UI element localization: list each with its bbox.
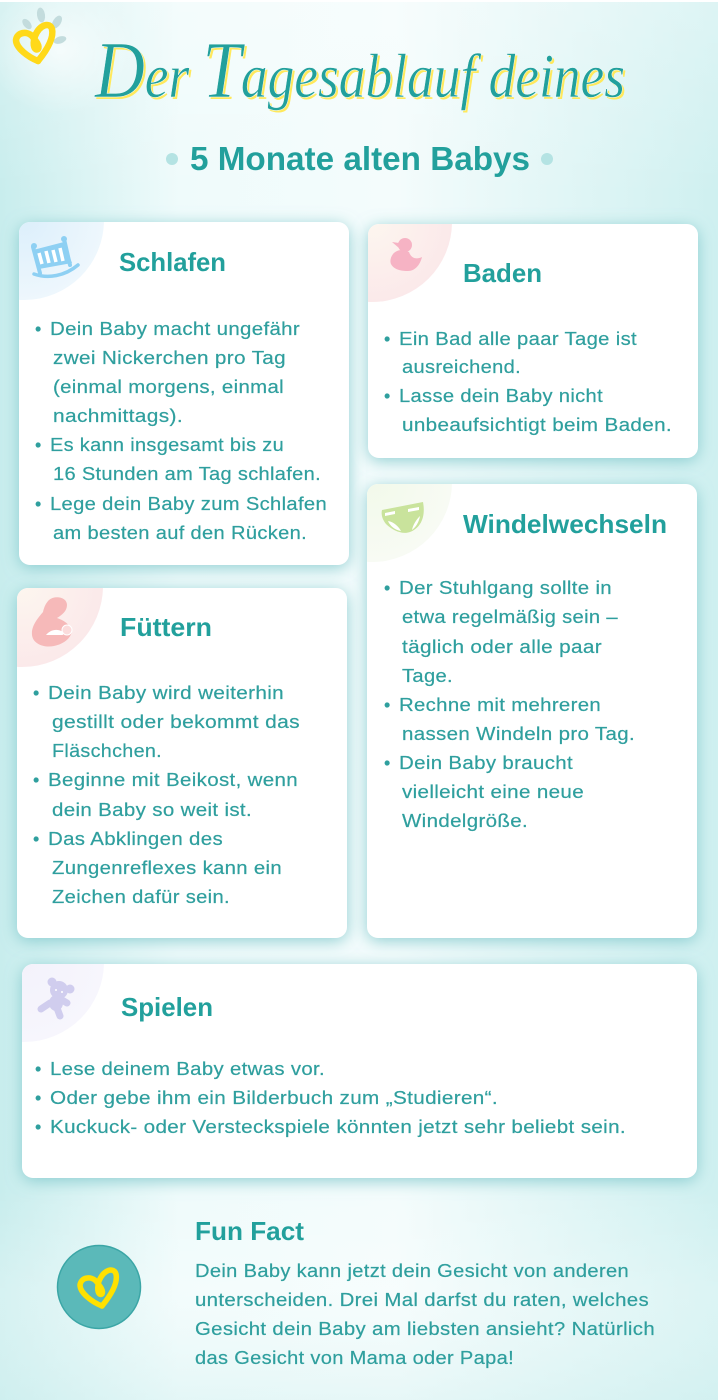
bullet list [35, 319, 327, 543]
bullet list: zwei Nickerchen pro Tag [53, 348, 286, 368]
bullet list: gestillt oder bekommt das [52, 712, 300, 732]
bullet list: Lese deinem Baby etwas vor. [50, 1059, 325, 1079]
bullet list: Zeichen dafür sein. [52, 887, 230, 907]
icon: mother nursing baby [32, 597, 72, 647]
bullet list [384, 578, 635, 831]
bullet list: Der Stuhlgang sollte in [399, 578, 612, 598]
bullet list: Beginne mit Beikost, wenn [48, 770, 298, 790]
card background [368, 224, 698, 458]
icon: diaper [382, 502, 424, 533]
title: Der Tagesablauf deines [96, 29, 627, 117]
bullet list: • [384, 753, 391, 773]
fun fact text [195, 1216, 655, 1368]
panel: Füttern [8, 580, 358, 952]
bullet list: dein Baby so weit ist. [52, 800, 252, 820]
bullet list: • [33, 829, 40, 849]
icon: crib [31, 236, 78, 276]
bullet list: • [384, 386, 391, 406]
corner tint [22, 964, 104, 1042]
bullet list: • [35, 1059, 42, 1079]
fun fact body: das Gesicht von Mama oder Papa! [195, 1348, 514, 1368]
bullet list: Ein Bad alle paar Tage ist [399, 329, 637, 349]
bullet list: • [33, 683, 40, 703]
corner tint [367, 484, 452, 562]
card background [367, 484, 697, 938]
fun fact body: Dein Baby kann jetzt dein Gesicht von anderen [195, 1261, 629, 1281]
heading: Füttern [120, 612, 212, 642]
card background [22, 964, 697, 1178]
bullet list: nassen Windeln pro Tag. [402, 724, 635, 744]
bullet list: Lege dein Baby zum Schlafen [50, 494, 327, 514]
bullet list: • [35, 494, 42, 514]
fun fact body: Gesicht dein Baby am liebsten ansieht? Natürlich [195, 1319, 655, 1339]
bullet list: unbeaufsichtigt beim Baden. [402, 415, 672, 435]
heading: Baden [463, 258, 542, 288]
subtitle: 5 Monate alten Babys [190, 140, 530, 177]
bullet list: vielleicht eine neue [402, 782, 584, 802]
bullet list: am besten auf den Rücken. [53, 523, 307, 543]
corner tint [19, 222, 104, 300]
bullet list: täglich oder alle paar [402, 637, 602, 657]
bullet list: Dein Baby macht ungefähr [50, 319, 300, 339]
bullet list: Es kann insgesamt bis zu [50, 435, 284, 455]
bullet list: (einmal morgens, einmal [53, 377, 284, 397]
heading: Spielen [121, 992, 213, 1022]
bullet list: • [33, 770, 40, 790]
bullet list: nachmittags). [53, 406, 183, 426]
bullet list [35, 1059, 626, 1137]
fun fact body: unterscheiden. Drei Mal darfst du raten, welches [195, 1290, 649, 1310]
card background [17, 588, 347, 938]
bullet list: • [384, 695, 391, 715]
bullet list: ausreichend. [402, 357, 521, 377]
bullet list: Dein Baby wird weiterhin [48, 683, 284, 703]
fun fact body [195, 1261, 655, 1368]
bullet list: Windelgröße. [402, 811, 528, 831]
bullet list: Oder gebe ihm ein Bilderbuch zum „Studieren“. [50, 1088, 498, 1108]
bullet list: 16 Stunden am Tag schlafen. [53, 464, 321, 484]
bullet list: • [35, 435, 42, 455]
icon: teddy bear [41, 978, 74, 1016]
fun fact heading: Fun Fact [195, 1216, 304, 1246]
bullet list: Das Abklingen des [48, 829, 223, 849]
bullet list [33, 683, 300, 907]
bullet list: • [35, 1117, 42, 1137]
card background [19, 222, 349, 565]
bullet list: • [384, 578, 391, 598]
bullet list: Tage. [402, 666, 453, 686]
bullet list: Fläschchen. [52, 741, 162, 761]
panel: Spielen [14, 956, 706, 1192]
fun fact icon: heart in teal circle [58, 1246, 140, 1328]
bullet list [384, 329, 672, 435]
corner tint [368, 224, 452, 302]
panel: Schlafen [10, 214, 360, 578]
bullet list: • [384, 329, 391, 349]
bullet list: Rechne mit mehreren [399, 695, 601, 715]
bullet list: • [35, 319, 42, 339]
panel: Windelwechseln [356, 476, 706, 952]
bullet list: Zungenreflexes kann ein [52, 858, 282, 878]
bullet list: etwa regelmäßig sein – [402, 607, 618, 627]
bullet list: • [35, 1088, 42, 1108]
bullet list: Dein Baby braucht [399, 753, 573, 773]
bullet list: Kuckuck- oder Versteckspiele könnten jetzt sehr beliebt sein. [50, 1117, 626, 1137]
bullet list: Lasse dein Baby nicht [399, 386, 603, 406]
corner tint [17, 588, 103, 667]
icon: rubber duck [390, 238, 422, 271]
title: Der Tagesablauf deines [94, 27, 625, 115]
logo: yellow heart with rays [16, 7, 67, 61]
heading: Windelwechseln [463, 509, 667, 539]
heading: Schlafen [119, 247, 226, 277]
panel: Baden [358, 216, 708, 472]
